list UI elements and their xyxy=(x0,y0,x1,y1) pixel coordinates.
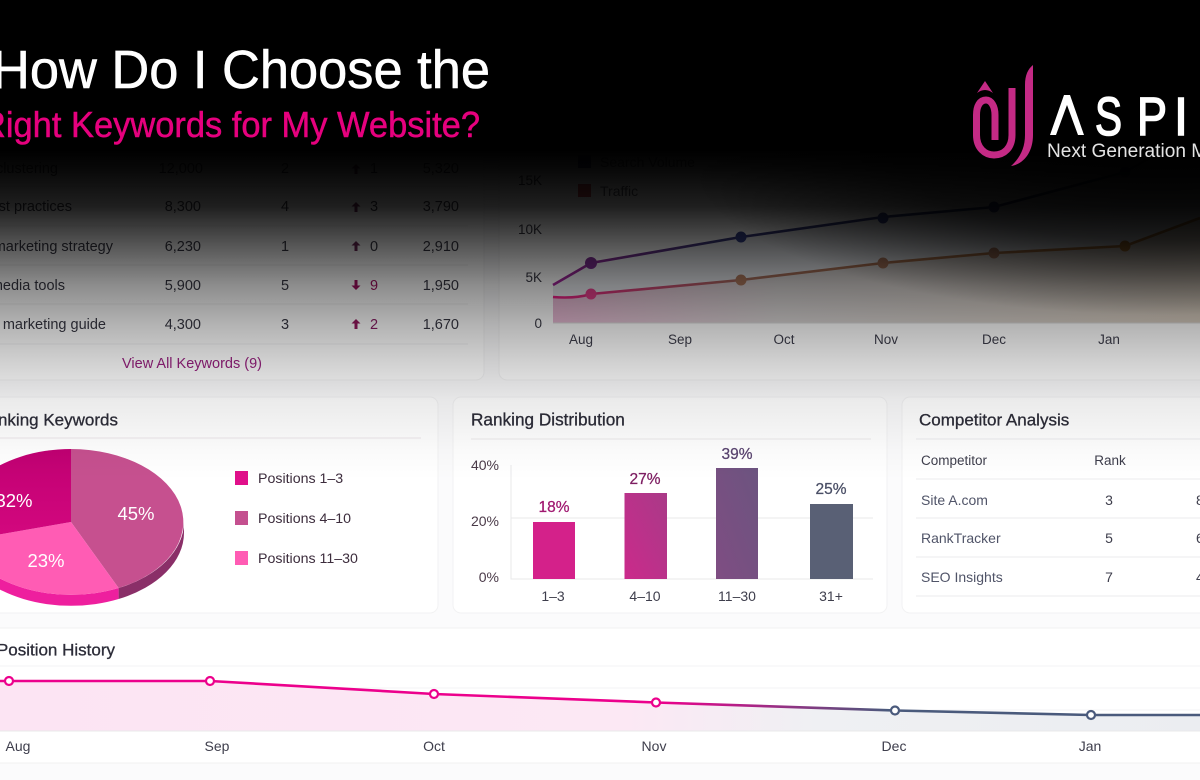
competitor table: 5 xyxy=(1105,530,1113,546)
y axis labels: 5K xyxy=(525,270,542,285)
x axis labels: Sep xyxy=(668,332,692,347)
history months: Nov xyxy=(642,738,666,754)
keyword table rows: 12,000 xyxy=(159,161,203,177)
y axis labels: 15K xyxy=(518,173,542,188)
bar categories: 1–3 xyxy=(541,588,565,604)
bar values: 25% xyxy=(815,481,847,498)
competitor table: Competitor xyxy=(921,453,988,468)
x axis labels: Oct xyxy=(773,332,795,347)
bar values: 18% xyxy=(538,499,570,516)
competitor table: RankTracker xyxy=(921,530,1001,546)
change arrows xyxy=(352,164,360,329)
bars xyxy=(533,468,853,579)
pie chart: 45% xyxy=(117,503,155,524)
competitor table: 3 xyxy=(1105,492,1113,508)
history months: Jan xyxy=(1079,738,1101,754)
y axis labels xyxy=(518,173,542,331)
area fills xyxy=(553,130,1200,323)
title: How Do I Choose the xyxy=(0,40,490,100)
keyword table rows xyxy=(0,161,459,333)
keyword table rows: 5 xyxy=(281,278,289,294)
pie chart xyxy=(0,449,184,606)
keyword table rows: 6,230 xyxy=(165,239,201,255)
traffic line xyxy=(553,218,1200,300)
chart legend xyxy=(578,154,695,199)
history months: Oct xyxy=(423,738,445,754)
logo wordmark: P xyxy=(1137,87,1167,147)
axis labels: 0% xyxy=(479,569,499,585)
keyword table rows: 5,320 xyxy=(423,161,459,177)
panel: search volume and traffic line chart xyxy=(499,120,1200,380)
heading: Competitor Analysis xyxy=(919,410,1069,430)
keyword table rows: 9 xyxy=(370,278,378,294)
keyword table rows: 4,300 xyxy=(165,317,201,333)
keyword table rows: 1,950 xyxy=(423,278,459,294)
x axis labels xyxy=(569,332,1120,347)
competitor table: SEO Insights xyxy=(921,569,1003,585)
keyword table rows: 8,300 xyxy=(165,199,201,215)
history area xyxy=(0,681,1200,731)
bar categories: 4–10 xyxy=(629,588,661,604)
panel: ranking keywords pie xyxy=(0,397,438,613)
title xyxy=(0,40,490,145)
keyword table rows: 2 xyxy=(281,161,289,177)
panel: ranking distribution bars xyxy=(453,397,887,613)
dark gradient overlay xyxy=(0,0,1200,480)
chart legend: Traffic xyxy=(600,183,638,199)
logo xyxy=(976,65,1200,166)
search volume line xyxy=(553,130,1200,285)
y axis labels: 10K xyxy=(518,222,542,237)
panel: keyword table xyxy=(0,120,484,380)
keyword table rows: 3 xyxy=(370,199,378,215)
logo wordmark xyxy=(1050,87,1188,147)
view all link: View All Keywords (9) xyxy=(122,356,262,372)
bar categories: 31+ xyxy=(819,588,843,604)
pie legend xyxy=(235,471,358,567)
x axis labels: Nov xyxy=(874,332,898,347)
bar values: 27% xyxy=(629,471,661,488)
axis labels xyxy=(471,457,499,585)
dark overlay right xyxy=(600,0,1200,320)
logo wordmark: S xyxy=(1095,87,1122,147)
x axis labels: Dec xyxy=(982,332,1006,347)
panel: position history xyxy=(0,628,1200,763)
pie legend: Positions 1–3 xyxy=(258,471,343,487)
y axis labels: 0 xyxy=(534,316,542,331)
history line xyxy=(0,677,1200,719)
competitor table xyxy=(921,453,1200,585)
keyword table rows: 5,900 xyxy=(165,278,201,294)
competitor table: 7 xyxy=(1105,569,1113,585)
keyword table rows: 3,790 xyxy=(423,199,459,215)
history months xyxy=(6,738,1101,754)
icon: paperclip mark xyxy=(976,65,1033,166)
keyword table rows: 0 xyxy=(370,239,378,255)
axis labels: 40% xyxy=(471,457,499,473)
competitor table: Site A.com xyxy=(921,492,988,508)
bar values xyxy=(538,446,847,516)
panel: competitor analysis xyxy=(902,397,1200,613)
keyword table rows: 1 xyxy=(281,239,289,255)
keyword table rows: 4 xyxy=(281,199,289,215)
keyword table rows: 2,910 xyxy=(423,239,459,255)
keyword table rows: 1,670 xyxy=(423,317,459,333)
bar values: 39% xyxy=(721,446,753,463)
pie legend: Positions 11–30 xyxy=(258,551,358,567)
keyword table rows: 1 xyxy=(370,161,378,177)
bar categories: 11–30 xyxy=(718,588,756,604)
x axis labels: Aug xyxy=(569,332,593,347)
logo wordmark: I xyxy=(1174,87,1188,147)
pie chart: 23% xyxy=(27,550,65,571)
keyword table rows: 2 xyxy=(370,317,378,333)
competitor table: Rank xyxy=(1094,453,1126,468)
history months: Sep xyxy=(205,738,230,754)
heading: Ranking Distribution xyxy=(471,410,625,430)
keyword table rows: 3 xyxy=(281,317,289,333)
history months: Aug xyxy=(6,738,30,754)
history months: Dec xyxy=(882,738,906,754)
chart legend: Search Volume xyxy=(600,154,695,170)
axis labels: 20% xyxy=(471,513,499,529)
bar categories xyxy=(541,588,843,604)
pie legend: Positions 4–10 xyxy=(258,511,351,527)
x axis labels: Jan xyxy=(1098,332,1120,347)
